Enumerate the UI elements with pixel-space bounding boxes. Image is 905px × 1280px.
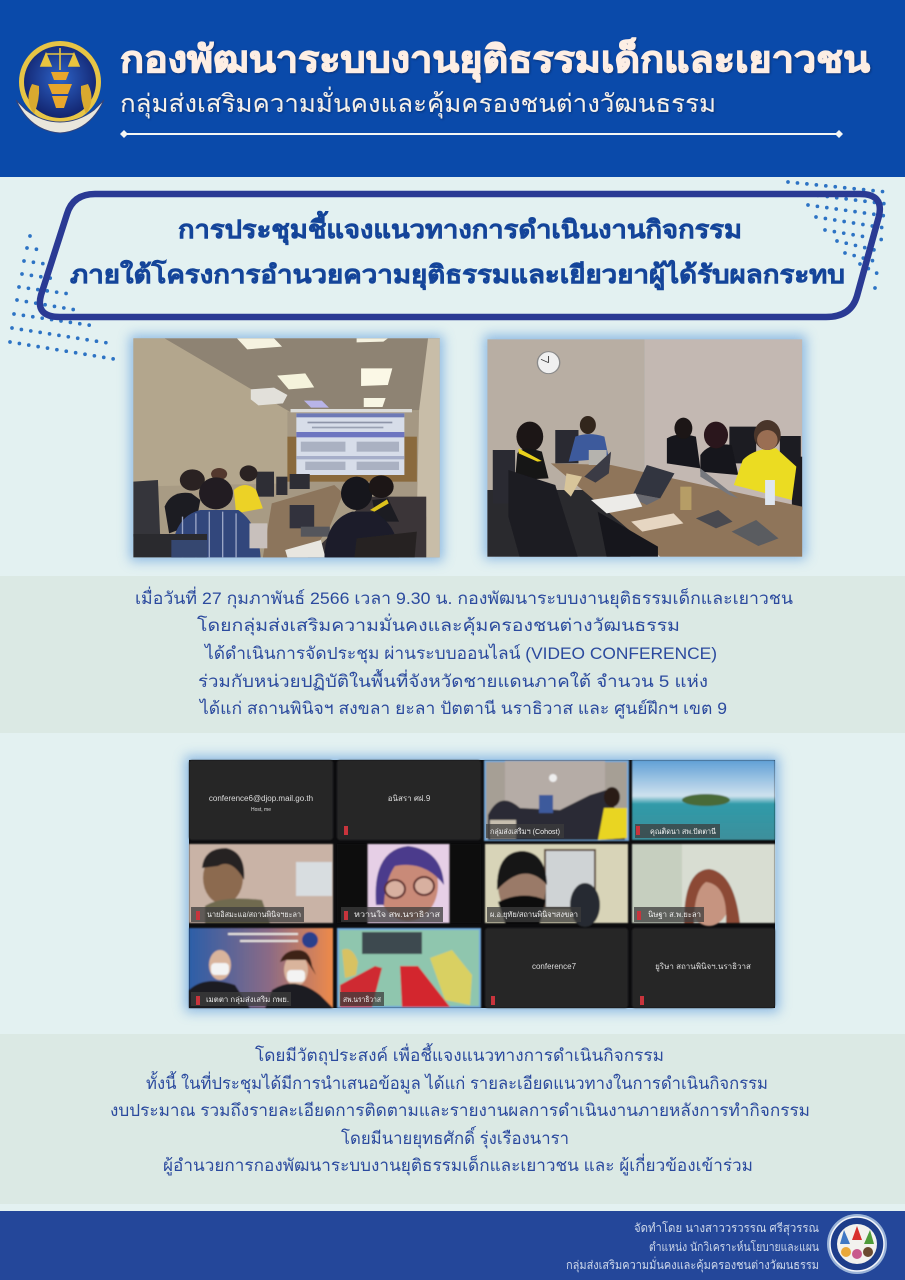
portrait — [337, 844, 481, 923]
text block: meeting description: เมื่อวันที่ 27 กุมภาพันธ์ 2566 เวลา 9.30 น. กองพัฒนาระบบงานยุติธรรมเด็กและเยาวชน — [135, 586, 793, 609]
cell labels: คุณติดนา สพ.ปัตตานี — [650, 827, 716, 836]
cell labels: นิษฐา ส.พ.ยะลา — [648, 910, 701, 919]
decorative rule — [120, 130, 843, 138]
two officers with masks — [189, 928, 333, 1008]
cell names: conference6@djop.mail.go.th — [209, 794, 313, 803]
cell names — [209, 794, 751, 972]
text block: meeting description: ร่วมกับหน่วยปฏิบัติในพื้นที่จังหวัดชายแดนภาคใต้ จำนวน 5 แห่ง — [198, 669, 708, 691]
cell labels: หวานใจ สพ.นราธิวาส — [354, 910, 441, 919]
video conference screenshot — [189, 760, 775, 1008]
text block: meeting objective: งบประมาณ รวมถึงรายละเอียดการติดตามและรายงานผลการดำเนินงานภายหลังการทำกิจกรรม — [110, 1101, 810, 1120]
cell names: Host, me — [251, 807, 271, 813]
cell labels — [191, 824, 720, 1006]
text block: meeting objective: ทั้งนี้ ในที่ประชุมได้มีการนำเสนอข้อมูล ได้แก่ รายละเอียดแนวทางในการดำเนินกิจกรรม — [146, 1071, 768, 1094]
cohost room — [485, 761, 628, 840]
dot pattern: top right — [788, 182, 887, 290]
woman in white room — [632, 844, 775, 923]
cell labels: สพ.นราธิวาส — [343, 995, 381, 1004]
subtitle: กลุ่มส่งเสริมความมั่นคงและคุ้มครองชนต่างวัฒนธรรม — [120, 86, 716, 119]
photo glows — [130, 335, 806, 1012]
text block: meeting description — [135, 586, 793, 719]
footer banner — [0, 1211, 905, 1280]
title: กองพัฒนาระบบงานยุติธรรมเด็กและเยาวชน — [120, 36, 870, 83]
footer credit text — [566, 1221, 819, 1273]
muted microphone icons — [196, 826, 644, 1005]
text block: meeting description: โดยกลุ่มส่งเสริมความมั่นคงและคุ้มครองชนต่างวัฒนธรรม — [197, 613, 680, 636]
panel: meeting title frame — [40, 194, 880, 317]
sea — [632, 760, 775, 840]
cell labels: ผ.อ.ยุทัย/สถานพินิจฯสงขลา — [490, 910, 578, 919]
text block: meeting objective: โดยมีวัตถุประสงค์ เพื่อชี้แจงแนวทางการดำเนินกิจกรรม — [255, 1043, 664, 1066]
band: description background — [0, 576, 905, 733]
heading line 1: การประชุมชี้แจงแนวทางการดำเนินงานกิจกรรม — [178, 210, 742, 246]
cell labels: เมตตา กลุ่มส่งเสริม กพย. — [206, 995, 289, 1004]
man at desk — [189, 844, 333, 923]
cell labels: นายอิสมะแอ/สถานพินิจฯยะลา — [207, 910, 301, 919]
icon: department seal — [16, 41, 104, 133]
footer credit text: กลุ่มส่งเสริมความมั่นคงและคุ้มครองชนต่างวัฒนธรรม — [566, 1256, 819, 1273]
text block: meeting description: ได้แก่ สถานพินิจฯ สงขลา ยะลา ปัตตานี นราธิวาส และ ศูนย์ฝึกฯ เขต 9 — [198, 698, 727, 719]
cell names: ยูริษา สถานพินิจฯ.นราธิวาส — [655, 962, 751, 972]
text block: meeting description: ได้ดำเนินการจัดประชุม ผ่านระบบออนไลน์ (VIDEO CONFERENCE) — [203, 643, 717, 664]
footer credit text: ตำแหน่ง นักวิเคราะห์นโยบายและแผน — [649, 1240, 819, 1254]
photo: meeting participants at table — [487, 339, 802, 557]
cell labels: กลุ่มส่งเสริมฯ (Cohost) — [490, 827, 560, 836]
text block: meeting objective: ผู้อำนวยการกองพัฒนาระบบงานยุติธรรมเด็กและเยาวชน และ ผู้เกี่ยวข้องเข้าร่วม — [163, 1153, 753, 1176]
cell names: อนิสรา ศฝ.9 — [388, 794, 431, 803]
dot pattern: bottom left — [10, 236, 120, 360]
footer credit text: จัดทำโดย นางสาววรวรรณ ศรีสุวรรณ — [634, 1221, 819, 1236]
text block: meeting objective: โดยมีนายยุทธศักดิ์ รุ่งเรืองนารา — [341, 1126, 569, 1149]
band: objective background — [0, 1034, 905, 1204]
header banner — [0, 0, 905, 177]
icon: cultural diversity emblem — [827, 1214, 887, 1274]
text block: meeting objective — [110, 1043, 810, 1176]
cell names: conference7 — [532, 962, 577, 971]
classroom — [338, 929, 480, 1007]
woman with mask — [485, 844, 628, 923]
heading line 2: ภายใต้โครงการอำนวยความยุติธรรมและเยียวยาผู้ได้รับผลกระทบ — [70, 259, 845, 291]
photo: meeting room with projector screen — [133, 338, 440, 557]
